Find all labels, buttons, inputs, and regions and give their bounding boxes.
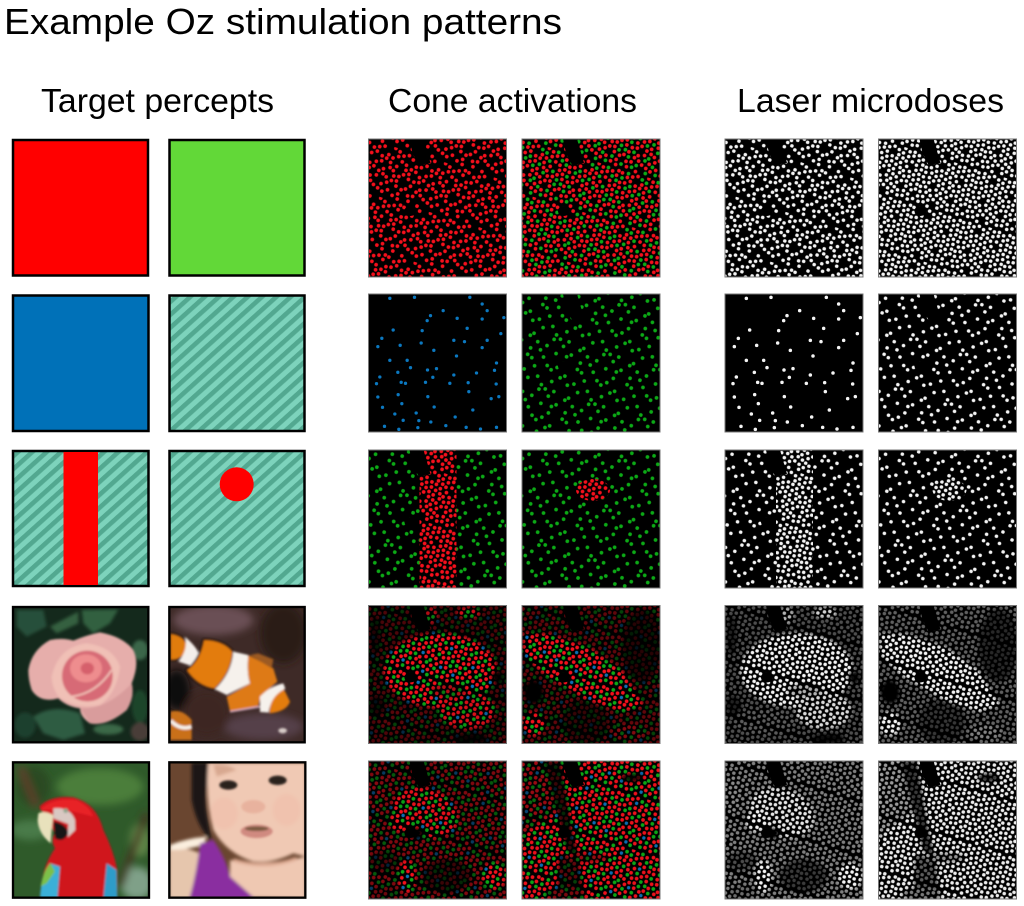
cones: blue only: [368, 294, 506, 432]
cones: red only: [368, 139, 506, 277]
cones: parrot: [368, 761, 506, 899]
cones: red and green: [522, 139, 660, 277]
heading: target percepts: Target percepts: [41, 82, 274, 119]
title: Example Oz stimulation patterns: [4, 1, 562, 42]
target photo: child's face: [168, 761, 306, 899]
laser: parrot: [725, 761, 863, 899]
laser: blue cone pattern: [725, 294, 863, 432]
cones: green with red bar: [368, 450, 506, 588]
laser: green cone pattern: [878, 294, 1016, 432]
laser: clownfish: [878, 606, 1016, 744]
laser: red cone pattern: [725, 139, 863, 277]
target: stripes with red bar: [13, 451, 148, 586]
laser: face: [878, 761, 1016, 899]
heading: laser microdoses: Laser microdoses: [737, 82, 1004, 119]
cones: face: [522, 761, 660, 899]
laser: bar pattern: [725, 450, 863, 588]
cones: clownfish: [522, 606, 660, 744]
cones: rose: [368, 606, 506, 744]
laser: spot pattern: [878, 450, 1016, 588]
target: stripes with red dot: [170, 451, 304, 586]
target photo: clownfish: [163, 603, 307, 743]
panel: cone activations column: [368, 82, 660, 899]
target: teal stripes: [170, 296, 304, 431]
cones: green only: [522, 294, 660, 432]
cones: green with red spot: [522, 450, 660, 588]
laser: red and green cone pattern: [878, 139, 1016, 277]
target: solid green square: [170, 140, 304, 276]
heading: cone activations: Cone activations: [388, 82, 637, 119]
target: solid red square: [13, 140, 148, 276]
target photo: macaw parrot: [10, 761, 153, 900]
laser: rose: [725, 606, 863, 744]
panel: target percepts column: [10, 82, 307, 900]
target: solid blue square: [13, 296, 148, 431]
target photo: pink rose: [12, 606, 149, 743]
panel: laser microdoses column: [725, 82, 1016, 899]
